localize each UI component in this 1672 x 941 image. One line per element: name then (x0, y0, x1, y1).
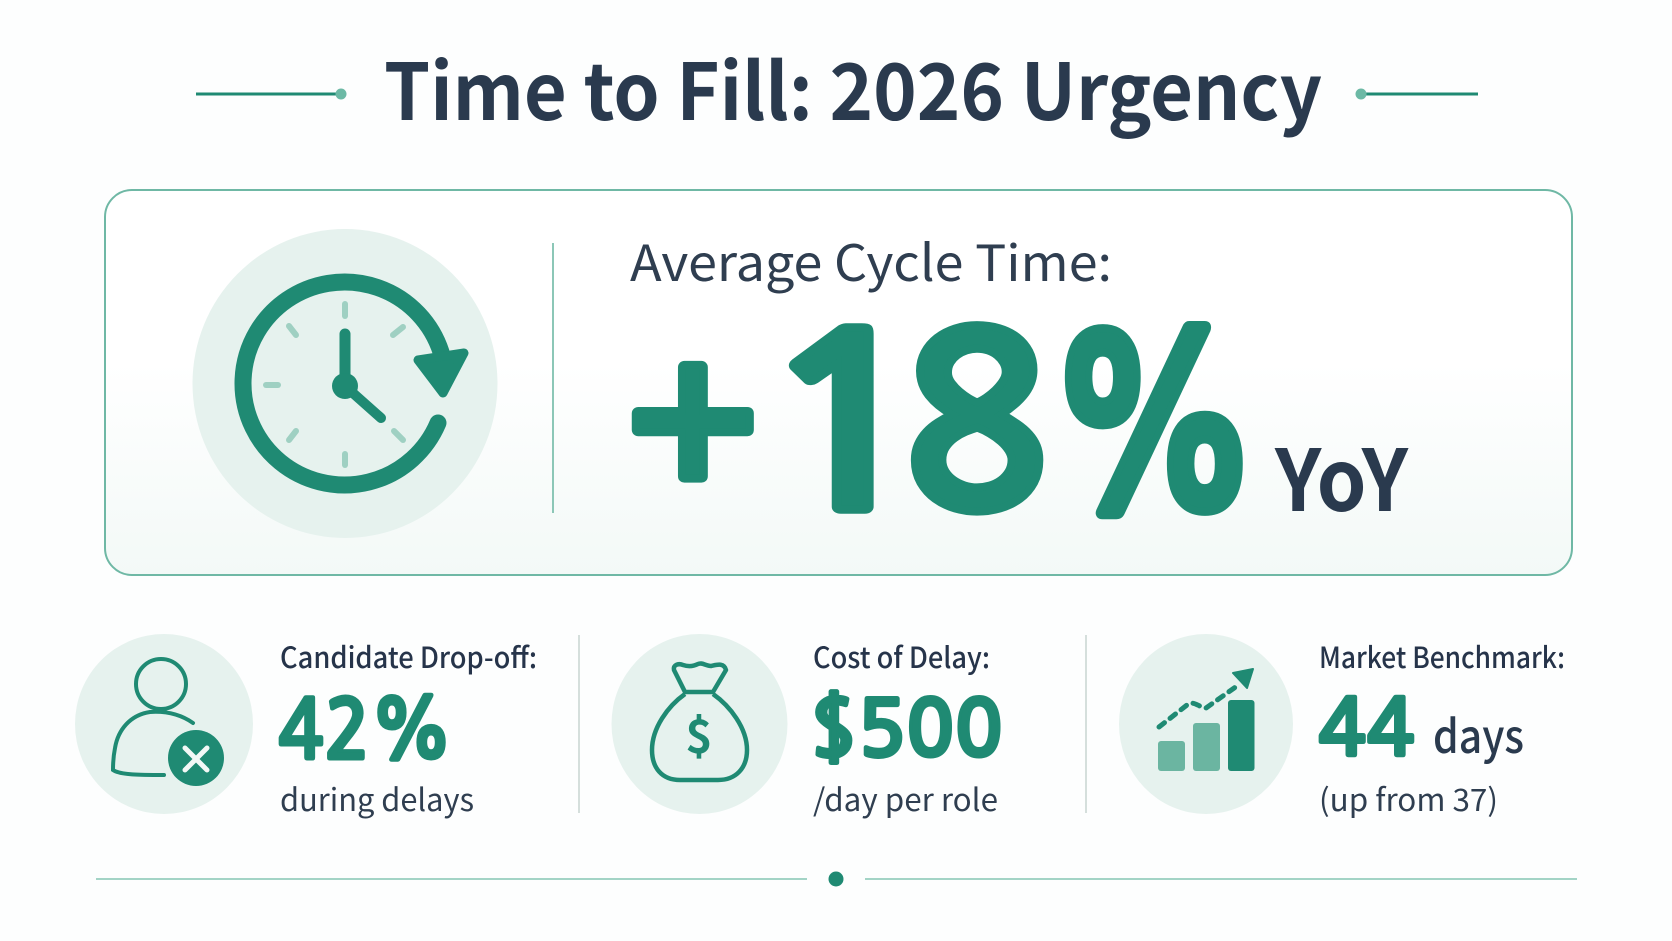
icon: rising bar chart (1119, 634, 1293, 814)
vertical divider 2 (1085, 635, 1087, 813)
label: Cost of Delay: (813, 635, 990, 677)
panel background (105, 190, 1572, 575)
header accent: left line (196, 88, 346, 100)
big number: 8 (902, 307, 1050, 545)
value: $500 (809, 690, 1003, 768)
big number: % (1046, 314, 1262, 547)
panel: average cycle time (105, 190, 1572, 575)
footer rule with dot (96, 872, 1577, 886)
value: 42% (278, 690, 453, 772)
label: average cycle time: Average Cycle Time: (630, 224, 1112, 296)
note: (up from 37) (1319, 775, 1498, 820)
big number: + (625, 325, 760, 531)
label: Candidate Drop-off: (280, 635, 537, 677)
icon: money bag (612, 634, 788, 814)
label: Market Benchmark: (1319, 635, 1565, 677)
title: Time to Fill: 2026 Urgency (384, 31, 1322, 143)
note: /day per role (813, 775, 998, 820)
stat: candidate drop-off (75, 634, 537, 820)
unit: days: days (1433, 701, 1524, 767)
icon: person with x badge (75, 634, 253, 814)
unit: YoY: YoY (1274, 413, 1409, 536)
big number (625, 307, 1262, 547)
header accent: right line (1356, 88, 1478, 100)
big number: 1 (756, 307, 936, 545)
stat: cost of delay (612, 634, 1003, 820)
icon: clock with circular arrow (192, 229, 498, 538)
icon: money bag: $ (685, 701, 713, 767)
vertical divider 1 (578, 635, 580, 813)
stat: market benchmark (1119, 634, 1565, 820)
panel divider (552, 243, 554, 513)
note: during delays (280, 775, 474, 820)
value: 44 (1318, 690, 1415, 768)
